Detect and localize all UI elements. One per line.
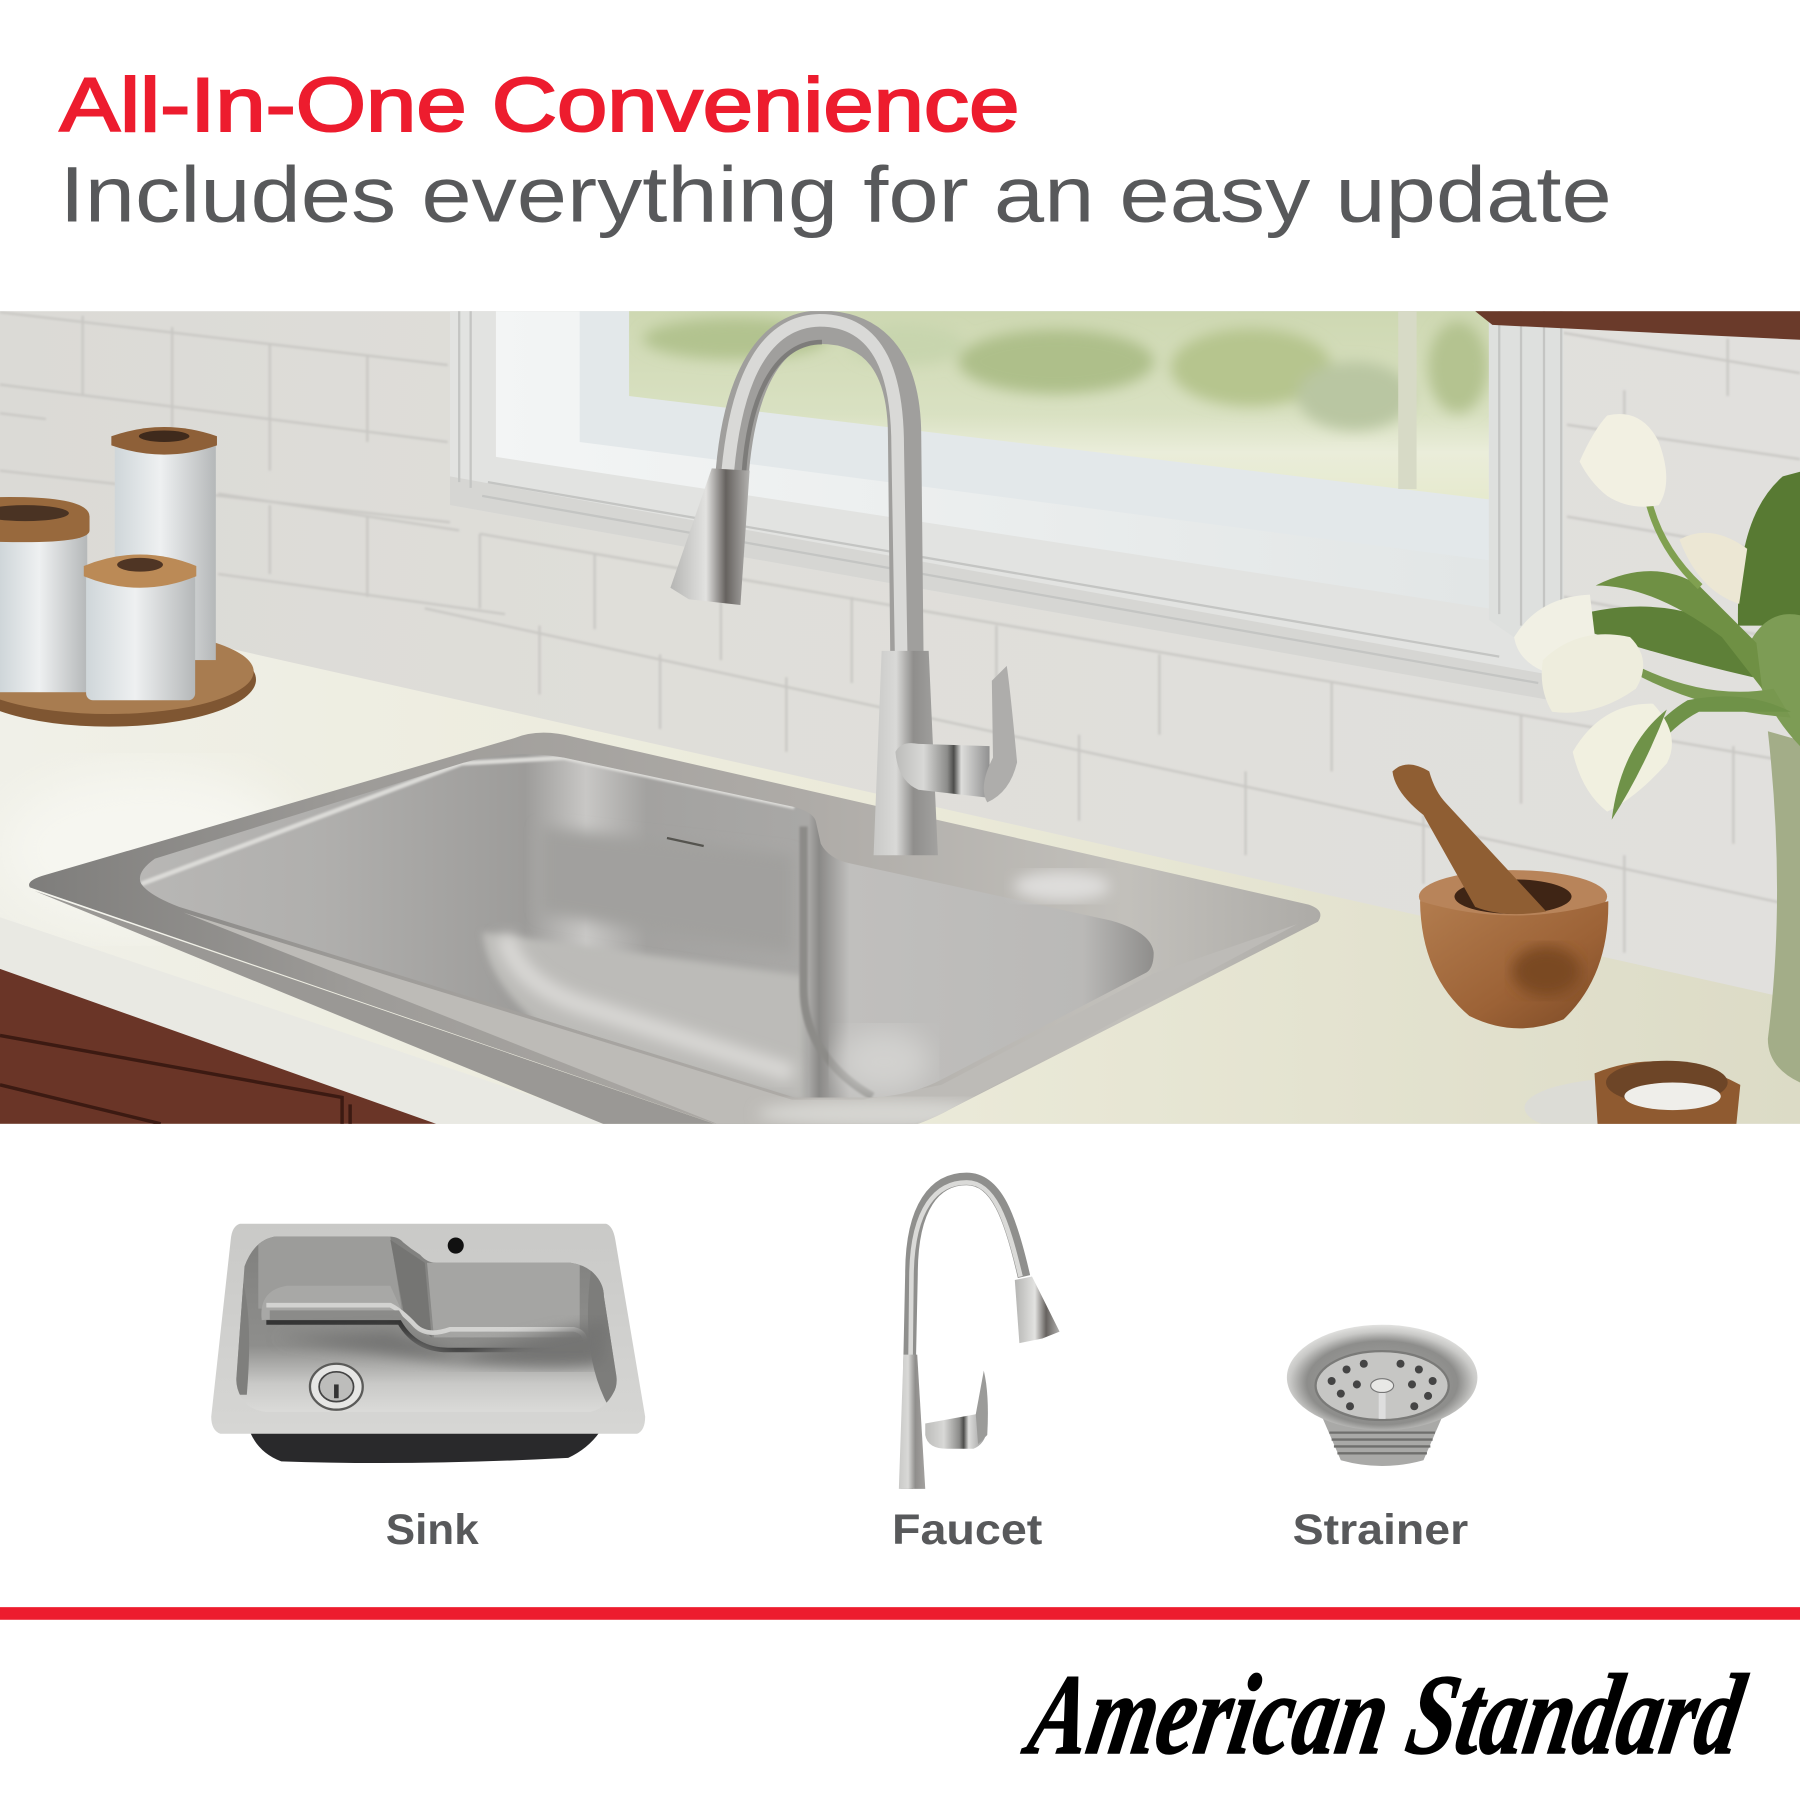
photo: kitchen sink scene <box>0 311 1800 1138</box>
jar: tall <box>111 427 217 660</box>
vase <box>1768 731 1800 1083</box>
sink basin <box>140 754 1154 1097</box>
product: strainer <box>1287 1325 1477 1466</box>
basin floor <box>482 932 804 1102</box>
wooden tray <box>0 642 256 727</box>
sink rim <box>29 733 1320 1131</box>
label: Faucet: Faucet <box>892 1506 1042 1553</box>
faucet <box>670 320 1017 855</box>
title: All-In-One Convenience <box>60 63 1019 148</box>
label: Strainer: Strainer <box>1293 1506 1468 1553</box>
lower cabinet <box>0 968 436 1124</box>
sink logo mark <box>667 838 704 846</box>
label: Sink: Sink <box>386 1506 479 1553</box>
product: sink <box>211 1224 645 1463</box>
subtitle: Includes everything for an easy update <box>60 150 1612 239</box>
upper cabinet <box>1475 311 1800 340</box>
jar: small <box>84 554 196 700</box>
window <box>450 311 1564 703</box>
countertop <box>0 597 1800 1124</box>
tulips and leaves <box>1514 414 1800 1083</box>
product sink faucet hole <box>448 1238 464 1254</box>
red divider bar <box>0 1607 1800 1620</box>
jar: left <box>0 497 90 692</box>
tiled wall <box>0 311 1800 1124</box>
product: faucet <box>899 1179 1060 1489</box>
salt bowl on plate <box>1524 1060 1740 1124</box>
product sink basin <box>236 1236 617 1402</box>
product sink drain <box>310 1364 363 1410</box>
sink in counter <box>29 733 1320 1131</box>
mortar and pestle <box>1392 765 1608 1028</box>
